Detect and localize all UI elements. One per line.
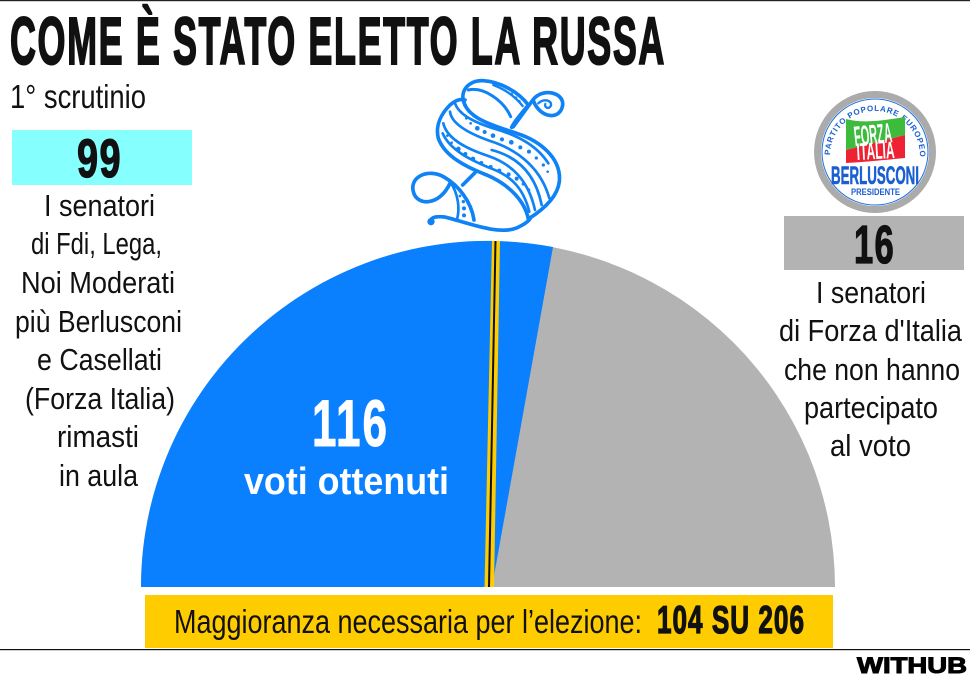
text block: left description — [15, 188, 182, 493]
top right loop — [513, 93, 563, 127]
slice: non voting senators — [141, 241, 835, 587]
text block: right description: partecipato — [804, 390, 938, 425]
text block: left description: (Forza Italia) — [25, 381, 175, 416]
icon: Forza Italia Berlusconi logo — [814, 91, 936, 213]
callout: majority bar: Maggioranza necessaria per l’elezione: — [174, 603, 642, 640]
inner strands — [455, 103, 548, 163]
icon: Forza Italia Berlusconi logo: PARTITO POPOLARE EUROPEO — [824, 105, 926, 156]
text block: right description: I senatori — [816, 275, 926, 310]
text block: left description: I senatori — [44, 188, 155, 223]
lower diagonal — [463, 173, 475, 185]
value box: 16: 16 — [854, 215, 895, 275]
value box: 99: 99 — [77, 129, 122, 189]
icon: Forza Italia Berlusconi logo: PRESIDENTE — [851, 187, 900, 198]
value box: 16 — [784, 215, 964, 275]
subtitle: 1° scrutinio — [10, 78, 146, 115]
majority marker line — [484, 241, 500, 587]
text block: right description — [779, 275, 963, 463]
text block: left description: e Casellati — [37, 342, 162, 377]
icon: Forza Italia Berlusconi logo: ITALIA — [856, 137, 895, 166]
panel: right senators — [779, 215, 964, 463]
icon: Forza Italia Berlusconi logo: FORZA — [852, 117, 893, 152]
text block: left description: in aula — [59, 458, 139, 493]
top hook — [463, 81, 528, 127]
slice: votes obtained — [141, 241, 553, 587]
text block: left description: di Fdi, Lega, — [31, 226, 162, 261]
text block: left description: più Berlusconi — [15, 304, 182, 339]
icon: Senate S logo — [413, 81, 563, 230]
value label: 116 votes: voti ottenuti — [244, 461, 449, 503]
value label: 116 votes — [244, 386, 449, 503]
callout: majority bar: 104 SU 206 — [657, 599, 805, 642]
callout: majority bar — [145, 595, 833, 648]
value label: 116 votes: 116 — [312, 386, 389, 460]
main silhouette — [437, 99, 559, 219]
panel: left senators — [12, 129, 192, 493]
text block: left description: Noi Moderati — [21, 265, 175, 300]
text block: right description: al voto — [830, 428, 911, 463]
text block: left description: rimasti — [57, 419, 139, 454]
bottom left loop — [413, 173, 474, 220]
value box: 99 — [12, 129, 192, 189]
chart: semicircle of votes — [141, 241, 835, 587]
